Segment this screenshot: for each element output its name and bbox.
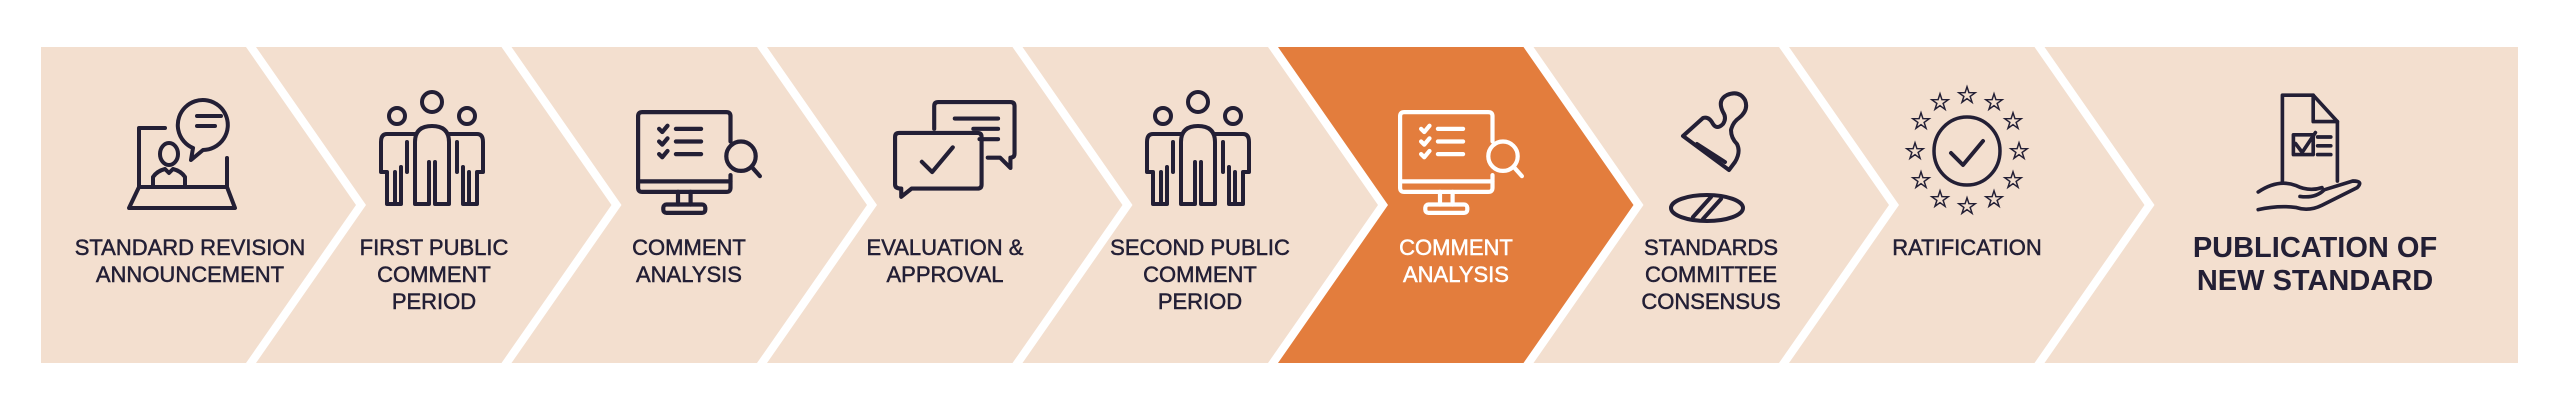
label: PUBLICATION OF: [2193, 232, 2437, 264]
icon: stamp: [1671, 93, 1746, 221]
panel: first public comment period: [256, 47, 612, 363]
label: ANALYSIS: [1403, 262, 1509, 287]
label: STANDARDS: [1644, 235, 1778, 260]
icon: monitor with checklist: [638, 112, 760, 213]
icon: monitor with checklist (white): [1400, 112, 1522, 213]
panel: standard revision announcement: [41, 47, 356, 363]
panel: evaluation & approval: [767, 47, 1122, 363]
icon: stars ring with check: ☆: [1983, 88, 2005, 116]
icon: stars ring with check: ☆: [1956, 192, 1978, 220]
label: PERIOD: [392, 289, 476, 314]
panel: ratification: [1789, 47, 2144, 363]
icon: chat bubbles with check: [895, 102, 1015, 197]
label: COMMENT: [1399, 235, 1513, 260]
icon: stars ring with check: ☆: [1910, 166, 1932, 194]
label: NEW STANDARD: [2197, 265, 2433, 297]
icon: stars ring with check: ☆: [1983, 185, 2005, 213]
label: APPROVAL: [887, 262, 1003, 287]
icon: stars ring with check: ☆: [1956, 81, 1978, 109]
label: COMMENT: [632, 235, 746, 260]
panel: second public comment period: [1022, 47, 1378, 363]
label: PERIOD: [1158, 289, 1242, 314]
icon: stars ring with check: ☆: [2002, 107, 2024, 135]
icon: document on hand: [2258, 95, 2360, 210]
label: RATIFICATION: [1892, 235, 2042, 260]
label: ANNOUNCEMENT: [96, 262, 284, 287]
label: CONSENSUS: [1641, 289, 1781, 314]
panel: comment analysis: [512, 47, 867, 363]
label: SECOND PUBLIC: [1110, 235, 1290, 260]
label: FIRST PUBLIC: [360, 235, 508, 260]
label: COMMENT: [1143, 262, 1257, 287]
label: STANDARD REVISION: [75, 235, 305, 260]
icon: three people: [381, 92, 483, 204]
panel: standards committee consensus: [1534, 47, 1889, 363]
icon: stars ring with check: [1904, 81, 2030, 220]
label: ANALYSIS: [636, 262, 742, 287]
icon: stars ring with check: ☆: [2002, 166, 2024, 194]
label: COMMENT: [377, 262, 491, 287]
icon: stars ring with check: ☆: [1910, 107, 1932, 135]
icon: laptop with speaker: [129, 100, 235, 208]
icon: stars ring with check: ☆: [2008, 137, 2030, 165]
icon: stars ring with check: ☆: [1929, 185, 1951, 213]
label: EVALUATION &: [867, 235, 1024, 260]
panel: comment analysis (highlighted): [1278, 47, 1634, 363]
panel: publication of new standard: [2044, 47, 2518, 363]
icon: three people: [1147, 92, 1249, 204]
icon: stars ring with check: ☆: [1929, 88, 1951, 116]
label: COMMITTEE: [1645, 262, 1777, 287]
icon: stars ring with check: ☆: [1904, 137, 1926, 165]
